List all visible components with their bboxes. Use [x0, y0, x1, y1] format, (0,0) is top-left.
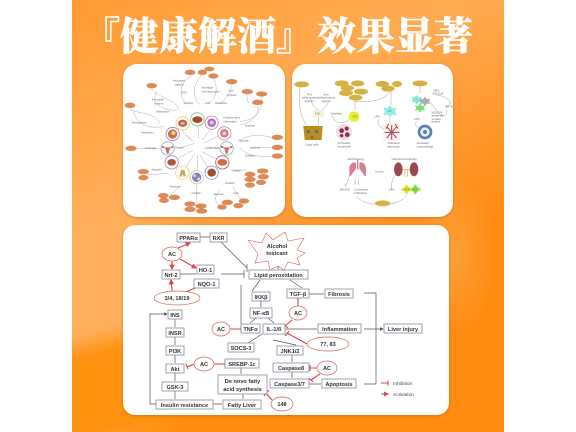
cell labels: IRF-8 [445, 104, 453, 108]
kidney cytokines [401, 184, 413, 195]
gene labels: Metabolism [215, 102, 227, 105]
cell labels: Nobiletin [331, 111, 343, 115]
legend: Inhibition [393, 381, 413, 387]
cell labels [302, 89, 453, 195]
flowchart labels: NQO-1 [198, 282, 215, 288]
cell labels: ceramide [432, 114, 444, 118]
panel: cell pathway diagram [292, 64, 453, 217]
title [81, 6, 473, 60]
cell labels: Pro- [307, 92, 313, 96]
gene labels: Inflammation [207, 146, 221, 149]
cell labels: Anti- [323, 92, 329, 96]
flowchart labels: INS [170, 313, 180, 319]
black connectors [150, 265, 324, 404]
gene labels: Apoptosis [245, 125, 256, 128]
red inhibition arrows [171, 243, 320, 400]
flowchart labels: Fatty Liver [228, 403, 257, 409]
cell labels: LPS [414, 117, 420, 121]
cell labels: Alcohol lung [347, 157, 364, 161]
organ circles [161, 113, 233, 184]
gene labels: capacity [175, 84, 184, 87]
cell labels: JAK/NO [339, 188, 350, 192]
flowchart labels: Fibrosis [328, 292, 350, 298]
gene labels: enzymes [154, 103, 164, 105]
cell labels: agents [322, 99, 331, 103]
flowchart labels: AC [217, 327, 225, 333]
flowchart labels: TNFα [243, 327, 258, 333]
flowchart labels: HO-1 [199, 268, 212, 274]
cell labels: protein [432, 117, 441, 121]
macrophage [418, 125, 432, 139]
cell labels: Infiltration [354, 191, 368, 195]
gene labels: Lipid [233, 193, 239, 195]
cell labels: Lung cells [305, 143, 319, 147]
flowchart labels: Alcohol [267, 244, 288, 250]
neutrophil [349, 111, 359, 122]
flowchart labels: SREBP-1c [228, 362, 256, 368]
flowchart labels: RXR [213, 236, 224, 242]
cell labels: LPS [389, 188, 394, 192]
flowchart labels: PPARα [179, 236, 198, 242]
gene labels: Autophagy [145, 147, 157, 150]
cell labels: Activated [417, 141, 429, 145]
cell labels: LPS [374, 114, 380, 118]
kidneys [394, 162, 403, 176]
flowchart labels: 77, 83 [320, 342, 336, 348]
cell labels: NO [388, 111, 392, 113]
astrocyte [383, 105, 397, 117]
legend: Activation [393, 392, 414, 398]
cell labels: inflammatory [302, 96, 320, 100]
flowchart labels: JNK1/2 [281, 349, 299, 355]
cell labels: kinase [432, 120, 441, 124]
flowchart labels: Nrf-2 [164, 273, 178, 279]
flowchart labels: acid synthesis [223, 387, 262, 393]
flowchart labels: De novo fatty [225, 379, 261, 385]
gene labels: Anti-oxidant [152, 99, 164, 102]
flowchart labels: 148 [277, 402, 287, 408]
legend [381, 380, 414, 398]
gene labels: Anti-apoptosis [132, 121, 147, 124]
orange background panel [72, 0, 504, 432]
gene labels: Apoptosis [152, 169, 163, 172]
cell labels: Glomerulonephritis [392, 157, 417, 161]
cell labels: Activated [387, 141, 400, 145]
flowchart labels: 3/4, 18/19 [165, 296, 189, 302]
cell labels: Activated [338, 141, 350, 145]
gene labels: Metabolism [142, 131, 154, 134]
flowchart boxes [156, 233, 422, 409]
yellow gene ellipses [294, 80, 427, 206]
PAD box [313, 110, 324, 117]
cell labels: NO [413, 190, 417, 192]
cell labels: Leukocyte [354, 188, 368, 192]
gene labels: Lipid [228, 91, 234, 93]
flowchart labels: AC [294, 311, 302, 317]
flowchart labels: Caspase3/7 [274, 382, 305, 388]
gene labels: Oxidation [225, 182, 236, 185]
orange microRNA ellipses [125, 67, 283, 214]
flowchart labels: AC [323, 366, 331, 372]
gene labels: Apoptosis [213, 193, 224, 196]
flowchart labels: AC [200, 362, 208, 368]
gene labels: Oxidation [232, 170, 242, 173]
cell labels: HIF1 [433, 89, 440, 93]
flowchart labels: PI3K [169, 349, 181, 355]
cell labels: GSH [315, 114, 320, 116]
red outlined ellipses [154, 247, 349, 411]
flowchart labels [161, 236, 419, 409]
cell labels: inflammatory [318, 96, 336, 100]
lungs [349, 162, 366, 176]
gene labels: ROS [182, 92, 187, 94]
gene labels: Anti-oxidant [173, 80, 185, 83]
flowchart labels: Insulin resistance [161, 403, 208, 409]
gene labels: Oxidation [192, 192, 202, 195]
cell labels: ROS [353, 117, 358, 119]
flowchart labels: SOCS-3 [231, 346, 251, 352]
cytokine stars [412, 95, 422, 104]
flowchart labels: Liver injury [388, 327, 419, 333]
flowchart labels: IKKβ [254, 295, 268, 301]
cell labels: macrophage [417, 144, 434, 148]
gene labels: Apoptosis [250, 146, 261, 149]
panel: organ network diagram [123, 64, 285, 217]
flowchart labels: Akt [170, 367, 180, 373]
gene labels: Lipid [205, 103, 211, 105]
flowchart labels: toxicant [266, 251, 288, 257]
cell labels: ROS [404, 190, 410, 192]
gene labels: Apoptosis [238, 140, 249, 143]
flowchart labels: INSR [168, 331, 182, 337]
gene labels: Oxidative stress [223, 116, 241, 119]
gene labels: Anti-fatigue [202, 86, 214, 89]
flowchart labels: GSK-3 [166, 385, 184, 391]
cell labels: NOX2/4 [432, 110, 443, 114]
flowchart labels: Inflammation [322, 327, 357, 333]
alcohol toxicant burst [248, 232, 305, 270]
cell labels: agents [305, 99, 314, 103]
cell labels: NOX1/4 [433, 92, 444, 96]
flowchart labels: NF-κB [253, 311, 269, 317]
panel: signaling pathway flowchart [123, 225, 449, 415]
flowchart labels: IL-1/ß [267, 327, 282, 333]
gene labels: Signaling [183, 103, 194, 105]
flowchart labels: Lipid peroxidation [254, 273, 303, 279]
flowchart labels: Caspase8 [278, 366, 304, 372]
flowchart labels: Apoptosis [325, 382, 353, 388]
gene labels: Inflammation [156, 111, 170, 114]
gene labels: Glucose [175, 148, 184, 150]
lung cells [303, 126, 323, 140]
flowchart labels: AC [168, 252, 176, 258]
gene labels [132, 80, 261, 196]
gene labels: Inflammation [223, 120, 237, 123]
cell labels: neutrophil [338, 144, 351, 148]
flowchart labels: TGF-β [290, 292, 307, 298]
gene labels: synthesis [227, 94, 237, 97]
cell labels: In vivo [375, 170, 384, 174]
gene labels: Anti-inflammation [202, 90, 220, 93]
gene labels: Reduction [170, 185, 181, 188]
cell labels: astrocyte [387, 144, 400, 148]
gene labels: Oxidation [245, 155, 256, 158]
